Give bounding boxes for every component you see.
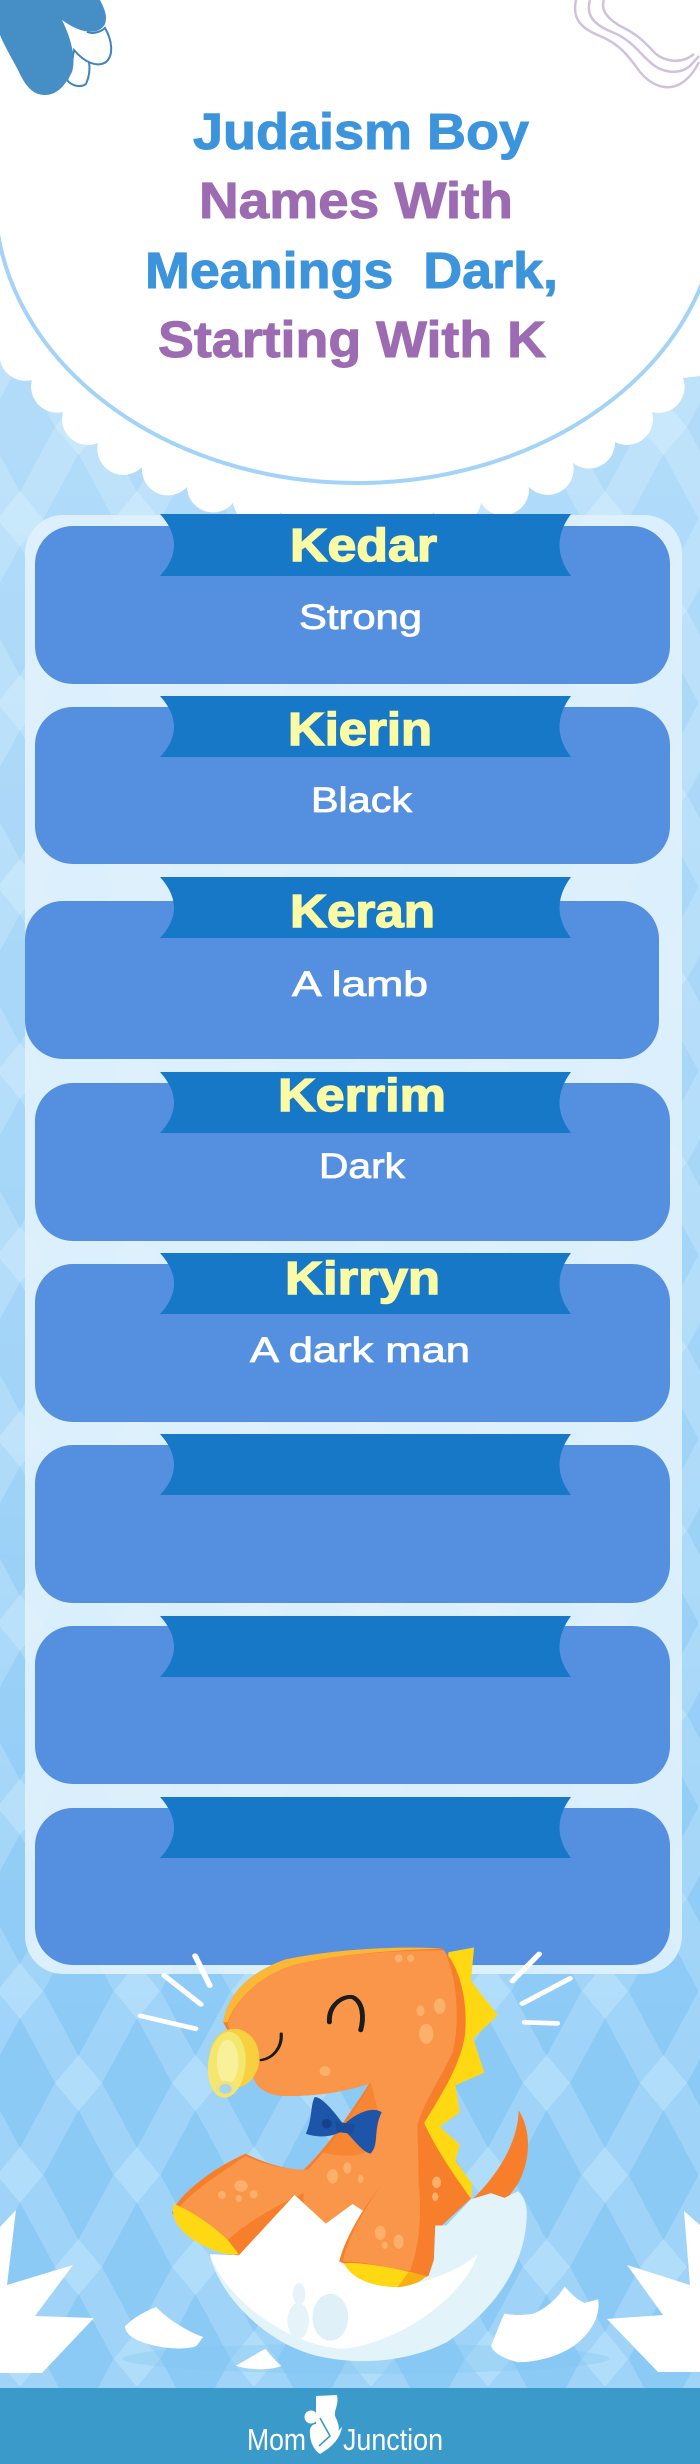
head and neck light side — [176, 1950, 457, 2254]
meaning: Black: Black — [311, 781, 413, 820]
logo text: Junction: Junction — [343, 2422, 443, 2457]
footer bar — [0, 2388, 700, 2464]
body spots — [218, 1954, 446, 2202]
shell fragment small — [236, 2349, 281, 2369]
pacifier — [205, 2029, 259, 2099]
right foot shade — [397, 2272, 426, 2287]
name: Kedar: Kedar — [290, 519, 437, 571]
ground shadow — [123, 2344, 609, 2374]
name: Kerrim: Kerrim — [278, 1069, 446, 1121]
logo: MomJunction — [247, 2395, 443, 2457]
right leg spots — [375, 2177, 441, 2249]
ribbon: Kirryn — [160, 1253, 571, 1314]
egg back — [210, 2191, 527, 2361]
icon: purple squiggles corner — [575, 0, 699, 87]
egg marks — [312, 2294, 348, 2341]
dinosaur body shadow side — [172, 1948, 471, 2287]
card: Kedar — [35, 514, 670, 684]
white shell shards right — [607, 2211, 700, 2372]
right leg — [339, 2188, 435, 2287]
header blue arc — [0, 140, 700, 483]
right leg light side — [343, 2184, 420, 2271]
bow tie — [306, 2097, 382, 2154]
empty card 6 — [35, 1434, 670, 1603]
logo text: Mom: Mom — [247, 2422, 306, 2457]
eyes — [329, 1997, 362, 2030]
card: Keran — [25, 877, 659, 1059]
ribbon: Keran — [160, 877, 571, 938]
panel: list frame — [25, 515, 682, 1974]
tail — [473, 2110, 528, 2206]
scalloped white header — [0, 0, 700, 543]
sparkle lines — [141, 1954, 570, 2029]
shell fragment left — [125, 2307, 203, 2348]
egg front white — [210, 2195, 478, 2349]
logo icon: mother and child — [304, 2395, 342, 2454]
meaning: A dark man: A dark man — [250, 1331, 470, 1370]
back spikes — [420, 1947, 498, 2200]
title: Names With — [199, 172, 513, 229]
arm shadow — [228, 2193, 304, 2256]
ribbon: Kerrim — [160, 1072, 571, 1133]
ribbon: Kierin — [160, 696, 571, 757]
title: Starting With K — [158, 311, 546, 368]
card: Kerrim — [35, 1069, 670, 1241]
title: Meanings Dark, — [145, 242, 558, 299]
shell fragment right — [491, 2287, 599, 2362]
name: Kierin: Kierin — [288, 703, 432, 755]
name: Keran: Keran — [290, 885, 435, 937]
empty card 7 — [35, 1616, 670, 1784]
title: Judaism Boy — [193, 103, 530, 160]
ribbon: Kedar — [160, 514, 571, 576]
empty card 8 — [35, 1797, 670, 1965]
head edge highlight — [223, 1948, 442, 2022]
meaning: Dark: Dark — [319, 1147, 406, 1186]
title — [145, 103, 558, 368]
card: Kierin — [35, 696, 670, 864]
white shell shards left — [0, 2210, 94, 2373]
meaning: A lamb: A lamb — [292, 965, 428, 1004]
icon: blue paw corner — [0, 0, 111, 95]
illustration: baby dinosaur hatching — [123, 1947, 609, 2374]
right foot — [344, 2263, 424, 2287]
card: Kirryn — [35, 1252, 670, 1422]
left foot — [173, 2204, 239, 2255]
neck shadow under bow — [321, 2082, 379, 2156]
name: Kirryn: Kirryn — [285, 1252, 440, 1304]
meaning: Strong: Strong — [299, 598, 422, 637]
